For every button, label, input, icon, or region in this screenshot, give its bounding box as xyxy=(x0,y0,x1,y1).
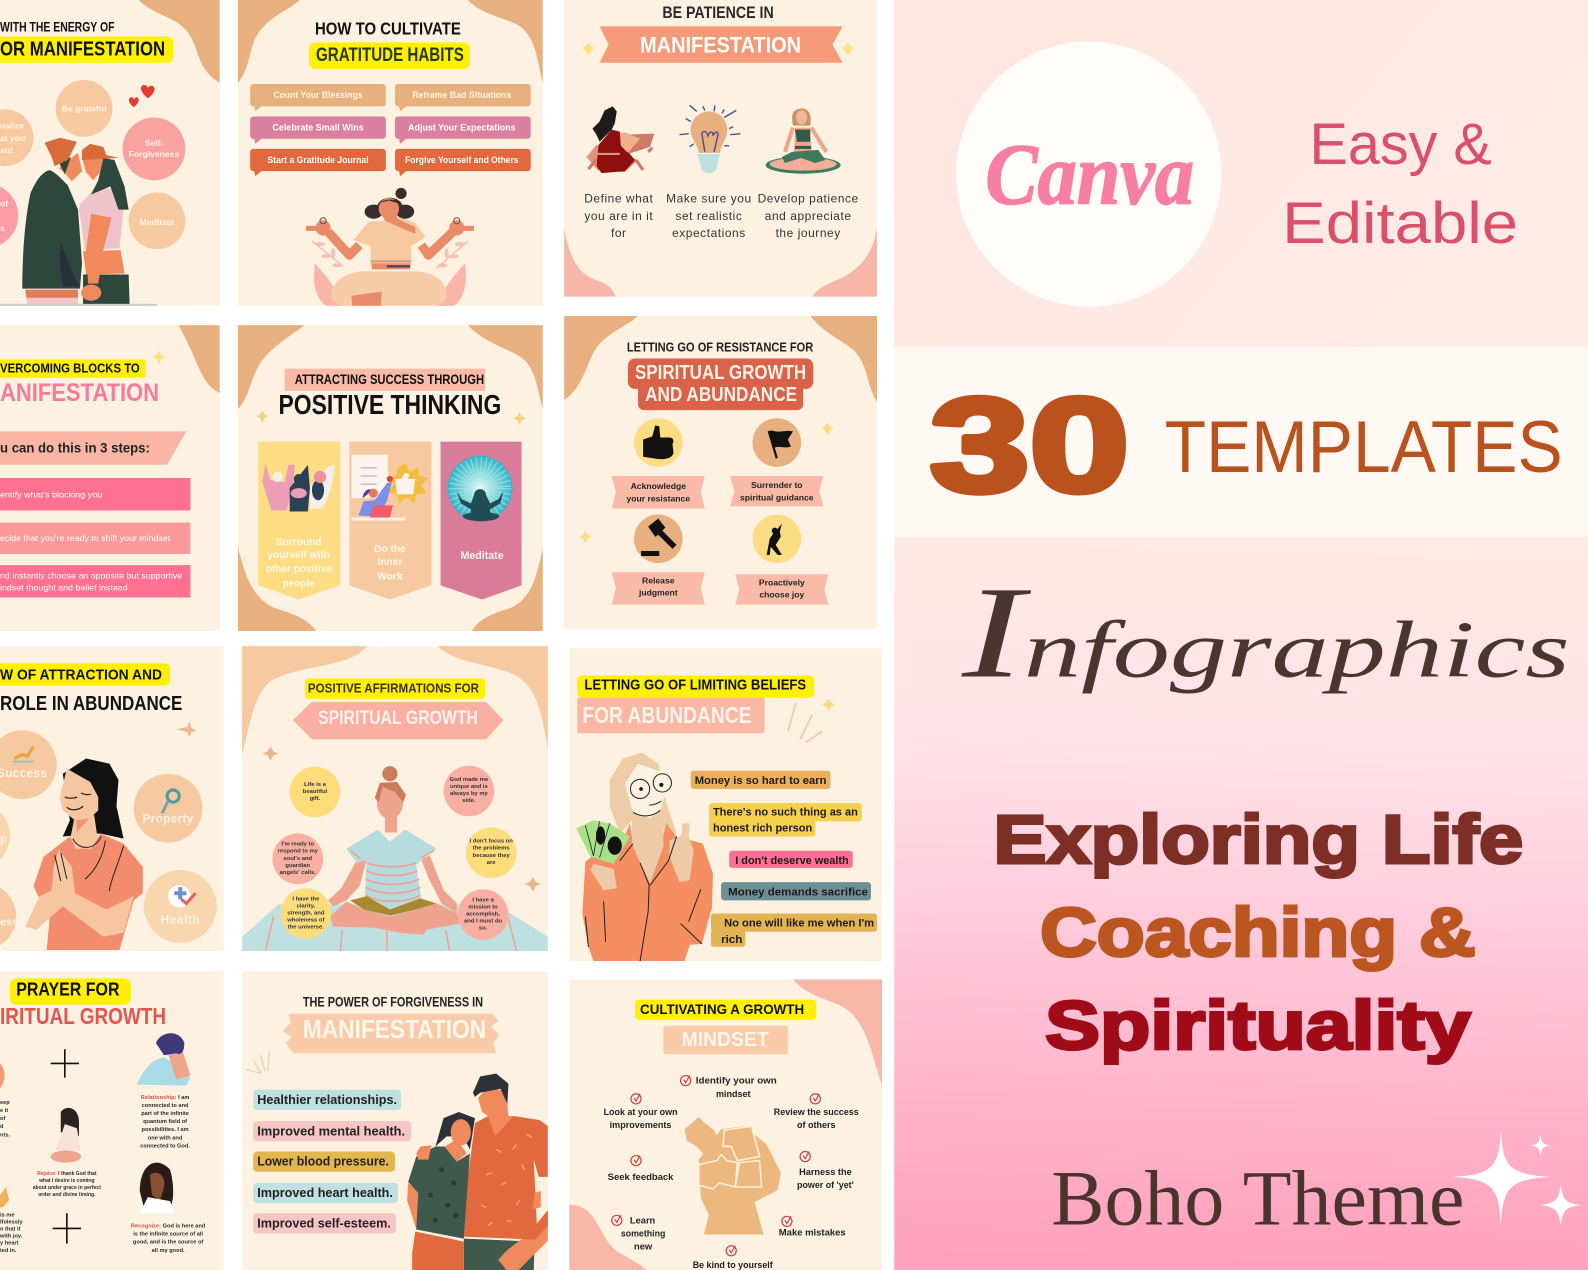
heading: GRATITUDE HABITS xyxy=(316,45,464,66)
icon: sparkle and accent lines xyxy=(788,699,835,742)
affirmation circles: clarity, xyxy=(297,903,315,909)
affirmation circles: side. xyxy=(462,798,476,804)
abundance circles: Property xyxy=(143,812,194,825)
panel: love manifestation template xyxy=(0,0,220,306)
heading: ROLE IN ABUNDANCE xyxy=(0,693,182,715)
mindset tips: power of 'yet' xyxy=(797,1180,854,1190)
mindset tips: of others xyxy=(797,1120,836,1130)
mindset tips: Learn xyxy=(630,1215,655,1225)
affirmation circles: because they xyxy=(473,853,510,859)
affirmation circles: and I must do xyxy=(464,919,503,925)
heading: MANIFESTATION xyxy=(640,33,801,58)
prayer text: good, and is the source of xyxy=(133,1240,203,1246)
mindset tips: new xyxy=(634,1242,653,1252)
three step captions: the journey xyxy=(776,226,841,240)
panel: promo sidebar xyxy=(894,0,1588,1270)
panel: growth mindset template xyxy=(569,979,882,1270)
affirmation circles: gift. xyxy=(310,796,321,802)
three step captions xyxy=(584,192,859,240)
affirmation circles: soul's and xyxy=(283,856,313,862)
heading: ATTRACTING SUCCESS THROUGH xyxy=(295,372,484,388)
prayer text: d xyxy=(0,1124,4,1130)
panel: power of forgiveness template xyxy=(242,971,548,1270)
heading xyxy=(0,360,158,401)
prayer text: connected to God. xyxy=(140,1143,190,1149)
prayer text: about under grace in perfect xyxy=(33,1185,101,1191)
affirmation circles: God made me xyxy=(450,777,489,783)
heading: POSITIVE THINKING xyxy=(279,389,501,420)
benefit pills: Improved mental health. xyxy=(257,1124,405,1138)
topic circles: Be grateful xyxy=(62,103,107,113)
prayer text: of xyxy=(0,1116,5,1122)
affirmation circles: wholeness of xyxy=(286,918,324,924)
prayer text: eep xyxy=(0,1100,10,1106)
affirmation circles: the universe. xyxy=(288,925,324,931)
heading: BE PATIENCE IN xyxy=(662,4,774,22)
main title: Spirituality xyxy=(1045,987,1471,1064)
benefit pills: Lower blood pressure. xyxy=(257,1155,389,1169)
main title xyxy=(994,801,1523,1064)
mindset tips: Identify your own xyxy=(696,1076,777,1086)
action ribbons: Surrender to xyxy=(751,480,803,490)
benefit pills: Improved heart health. xyxy=(257,1186,393,1200)
step bars: indset thought and belief instead xyxy=(0,582,128,592)
topic circles: ant xyxy=(0,145,13,155)
main title: Exploring Life xyxy=(994,801,1523,878)
heading: CULTIVATING A GROWTH xyxy=(640,1002,804,1018)
affirmation circles: mission to xyxy=(468,904,498,910)
mindset tips: Harness the xyxy=(799,1167,852,1177)
illustration: praying figures xyxy=(0,1033,190,1213)
banner: do the inner work xyxy=(349,442,431,600)
heading: VERCOMING BLOCKS TO xyxy=(0,361,140,376)
banner: surround yourself: people xyxy=(282,578,315,589)
benefit pills xyxy=(253,1090,411,1234)
heading xyxy=(600,4,843,63)
prayer text: e it xyxy=(0,1108,8,1114)
icon: yellow sparkles xyxy=(582,43,854,56)
illustration: praying woman xyxy=(25,759,143,950)
topic circles: ualize xyxy=(0,121,24,131)
topic circles: Self- xyxy=(145,138,163,148)
action ribbons: Proactively xyxy=(759,577,805,587)
abundance circles: Health xyxy=(160,913,200,927)
habit speech bubbles: Reframe Bad Situations xyxy=(412,90,511,101)
heading: PRAYER FOR xyxy=(16,980,120,1000)
prayer text: y heart xyxy=(0,1241,19,1247)
prayer text: quantum field of xyxy=(143,1119,187,1125)
prayer text: Relationship: I am xyxy=(141,1095,189,1101)
banner: do the inner work: Work xyxy=(377,571,403,582)
icon: hearts xyxy=(129,85,155,107)
illustration: meditating woman xyxy=(306,188,474,306)
mindset tips: Review the success xyxy=(774,1107,859,1117)
heading: MANIFESTATION xyxy=(303,1014,486,1044)
three step captions: Make sure you xyxy=(666,192,752,206)
affirmation circles: the problems xyxy=(473,846,510,852)
icon: sparkles xyxy=(256,410,526,425)
heading: SPIRITUAL GROWTH xyxy=(635,362,806,384)
heading: OR MANIFESTATION xyxy=(0,39,165,61)
heading: LETTING GO OF LIMITING BELIEFS xyxy=(584,677,806,694)
limiting belief labels xyxy=(691,771,877,947)
illustration: yoga woman xyxy=(766,108,841,174)
icon: joyful dancer xyxy=(752,514,801,563)
heading: HOW TO CULTIVATE xyxy=(315,18,461,38)
topic circles: of xyxy=(0,199,8,209)
illustration: kissing couple xyxy=(0,138,157,306)
affirmation circles: respond to my xyxy=(278,849,319,855)
heading: ANIFESTATION xyxy=(0,379,159,407)
affirmation circles xyxy=(272,766,517,940)
heading xyxy=(635,1000,816,1054)
heading: WITH THE ENERGY OF xyxy=(0,19,115,35)
affirmation circles: unique and is xyxy=(450,784,489,790)
prayer text: is me xyxy=(0,1212,14,1218)
mindset tips: improvements xyxy=(610,1120,671,1130)
prayer text: part of the infinite xyxy=(141,1111,189,1117)
prayer text xyxy=(0,1095,206,1254)
boho theme text: Boho Theme xyxy=(1051,1155,1464,1241)
main title: Coaching & xyxy=(1040,894,1476,971)
mindset tips: something xyxy=(621,1229,665,1239)
prayer text: ied in. xyxy=(0,1248,17,1254)
heading xyxy=(283,995,499,1053)
affirmation circles: strength, and xyxy=(287,911,325,917)
heading xyxy=(280,368,500,414)
prayer text: is the infinite source of all xyxy=(133,1232,203,1238)
30 templates xyxy=(930,371,1563,520)
topic circles: s xyxy=(0,223,5,233)
affirmation circles: are xyxy=(487,860,496,866)
action ribbons xyxy=(612,476,828,605)
mindset tips: Be kind to yourself xyxy=(693,1260,774,1270)
step bars xyxy=(0,478,190,598)
limiting belief labels: There's no such thing as an xyxy=(713,806,858,818)
banner: do the inner work: Do the xyxy=(374,544,406,555)
affirmation circles: I'm ready to xyxy=(281,842,314,848)
script word: Infographics: Infographics xyxy=(961,561,1570,706)
panel: be patience template xyxy=(564,0,877,297)
easy and editable text xyxy=(1282,112,1518,256)
banner: surround yourself: other positive xyxy=(266,564,332,575)
heading: AND ABUNDANCE xyxy=(645,384,797,406)
Canva badge xyxy=(956,42,1221,307)
banner: meditate: Meditate xyxy=(461,550,504,562)
habit speech bubbles: Count Your Blessings xyxy=(273,90,363,101)
topic circles: Forgiveness xyxy=(129,149,179,159)
abundance circles xyxy=(0,730,217,950)
prayer text: Rejoice: I thank God that xyxy=(37,1171,97,1177)
three step captions: Define what xyxy=(584,192,653,206)
three step captions: expectations xyxy=(672,226,746,240)
prayer text: all my good. xyxy=(152,1248,185,1254)
affirmation circles: I don't focus on xyxy=(469,839,513,845)
banner: surround yourself: yourself with xyxy=(268,550,330,561)
limiting belief labels: No one will like me when I'm xyxy=(724,918,874,930)
action ribbons: Release xyxy=(642,575,675,585)
banner: surround yourself: Surround xyxy=(276,537,322,548)
action ribbons: spiritual guidance xyxy=(740,492,814,502)
heading: W OF ATTRACTION AND xyxy=(0,667,162,684)
prayer text: Recognize: God is here and xyxy=(131,1223,206,1229)
affirmation circles: angels' calls. xyxy=(280,870,316,876)
panel: law of attraction template xyxy=(0,646,224,951)
step bars: nd instantly choose an opposite but supportive xyxy=(0,570,183,580)
heading: FOR ABUNDANCE xyxy=(582,702,751,728)
step bars: ecide that you're ready to shift your mindset xyxy=(0,533,171,543)
Canva badge: Canva xyxy=(985,126,1194,223)
action ribbons: your resistance xyxy=(627,493,690,503)
accent lines xyxy=(246,1051,269,1074)
heading xyxy=(627,339,814,410)
woman figure xyxy=(79,144,130,305)
topic circles: at you xyxy=(0,133,25,143)
banner: surround yourself xyxy=(258,442,340,600)
habit speech bubbles: Adjust Your Expectations xyxy=(408,123,515,134)
heading xyxy=(0,19,173,63)
heading xyxy=(293,679,503,739)
limiting belief labels: rich xyxy=(721,934,743,946)
icon: white sparkles xyxy=(1452,1130,1581,1225)
icon: sparkles xyxy=(176,721,196,737)
mindset tips: mindset xyxy=(716,1089,750,1099)
panel: positive thinking template xyxy=(238,325,543,631)
heading: POSITIVE AFFIRMATIONS FOR xyxy=(308,681,479,696)
banner: do the inner work: Inner xyxy=(378,557,402,568)
affirmation circles: Life is a xyxy=(304,782,327,788)
abundance circles: ess xyxy=(0,917,19,929)
illustration: embracing couple xyxy=(407,1074,548,1270)
limiting belief labels: Money demands sacrifice xyxy=(728,886,868,898)
icon: sparkles xyxy=(579,422,833,544)
icon: check marks xyxy=(612,1076,820,1256)
prayer text: what I desire is coming xyxy=(38,1178,95,1184)
mindset tips: Make mistakes xyxy=(779,1228,846,1238)
easy and editable text: Easy & xyxy=(1309,112,1492,177)
heading: IRITUAL GROWTH xyxy=(0,1003,166,1029)
benefit pills: Healthier relationships. xyxy=(257,1093,397,1107)
three step captions: you are in it xyxy=(584,209,653,223)
affirmation circles: beautiful xyxy=(303,789,328,795)
heading: SPIRITUAL GROWTH xyxy=(318,708,478,729)
three step captions: Develop patience xyxy=(758,192,859,206)
topic circles xyxy=(0,80,185,249)
illustration: puzzle head xyxy=(685,1117,781,1235)
prayer text: order and divine timing. xyxy=(38,1192,96,1198)
illustration: woman with cash xyxy=(576,752,713,961)
limiting belief labels: honest rich person xyxy=(713,822,812,834)
action ribbons: judgment xyxy=(638,588,678,598)
heading: MINDSET xyxy=(682,1029,769,1051)
icon: flag xyxy=(752,418,801,467)
abundance circles: p xyxy=(0,834,7,846)
affirmation circles: so. xyxy=(479,926,488,932)
action ribbons: Acknowledge xyxy=(631,481,686,491)
habit speech bubbles: Forgive Yourself and Others xyxy=(405,155,519,166)
affirmation circles: guardian xyxy=(285,863,311,869)
easy and editable text: Editable xyxy=(1282,191,1518,256)
heading xyxy=(0,978,166,1029)
habit speech bubbles: Celebrate Small Wins xyxy=(272,123,364,134)
prayer text: n that it xyxy=(0,1227,21,1233)
illustration: light bulb xyxy=(680,105,740,173)
prayer text: connected to and xyxy=(142,1103,189,1109)
affirmation circles: always by my xyxy=(450,791,489,797)
heading: LETTING GO OF RESISTANCE FOR xyxy=(627,339,814,354)
banner: meditate xyxy=(441,442,522,600)
30 templates: 30 xyxy=(930,371,1129,520)
prayer text: with joy. xyxy=(0,1234,23,1240)
icon: crosses xyxy=(51,1049,81,1244)
prayer text: nts. xyxy=(0,1132,10,1138)
three step captions: and appreciate xyxy=(765,209,852,223)
step bars: entify what's blocking you xyxy=(0,489,103,499)
prayer text: one with and xyxy=(148,1135,183,1141)
three step captions: for xyxy=(611,226,627,240)
panel: gratitude habits template xyxy=(238,0,543,306)
icon: thumbs up xyxy=(634,418,683,467)
heading xyxy=(577,676,814,733)
habit speech bubbles: Start a Gratitude Journal xyxy=(267,155,369,166)
illustration: woman at desk xyxy=(586,106,654,173)
30 templates: TEMPLATES xyxy=(1165,407,1563,488)
illustration: meditating woman on mat xyxy=(242,766,548,951)
heading xyxy=(0,663,182,715)
prayer text: Ifolessly xyxy=(0,1219,23,1225)
limiting belief labels: Money is so hard to earn xyxy=(695,775,827,787)
panel: positive affirmations template xyxy=(242,646,548,951)
heading: THE POWER OF FORGIVENESS IN xyxy=(303,995,483,1010)
heading xyxy=(309,18,470,69)
icon: sparkles xyxy=(262,746,541,891)
affirmation circles: accomplish, xyxy=(466,912,500,918)
mindset tips: Seek feedback xyxy=(608,1172,674,1182)
benefit pills: Improved self-esteem. xyxy=(257,1216,391,1230)
panel: prayer template xyxy=(0,971,224,1270)
icon: gavel xyxy=(634,514,683,563)
panel: letting go of resistance template xyxy=(564,316,877,629)
action ribbons: choose joy xyxy=(759,590,805,600)
panel: limiting beliefs template xyxy=(569,648,882,961)
steps ribbon xyxy=(0,431,186,465)
habit speech bubbles xyxy=(250,84,531,176)
icon: sparkle xyxy=(153,350,165,365)
mindset tips: Look at your own xyxy=(604,1107,678,1117)
prayer text: possibilities. I am xyxy=(142,1127,189,1133)
limiting belief labels: I don't deserve wealth xyxy=(735,855,849,867)
mindset tips xyxy=(604,1076,859,1270)
topic circles: Meditate xyxy=(140,217,175,227)
affirmation circles: I have a xyxy=(472,897,495,903)
affirmation circles: I have the xyxy=(292,896,320,902)
panel: overcoming blocks template xyxy=(0,325,220,631)
three step captions: set realistic xyxy=(675,209,742,223)
steps ribbon: u can do this in 3 steps: xyxy=(0,441,150,456)
